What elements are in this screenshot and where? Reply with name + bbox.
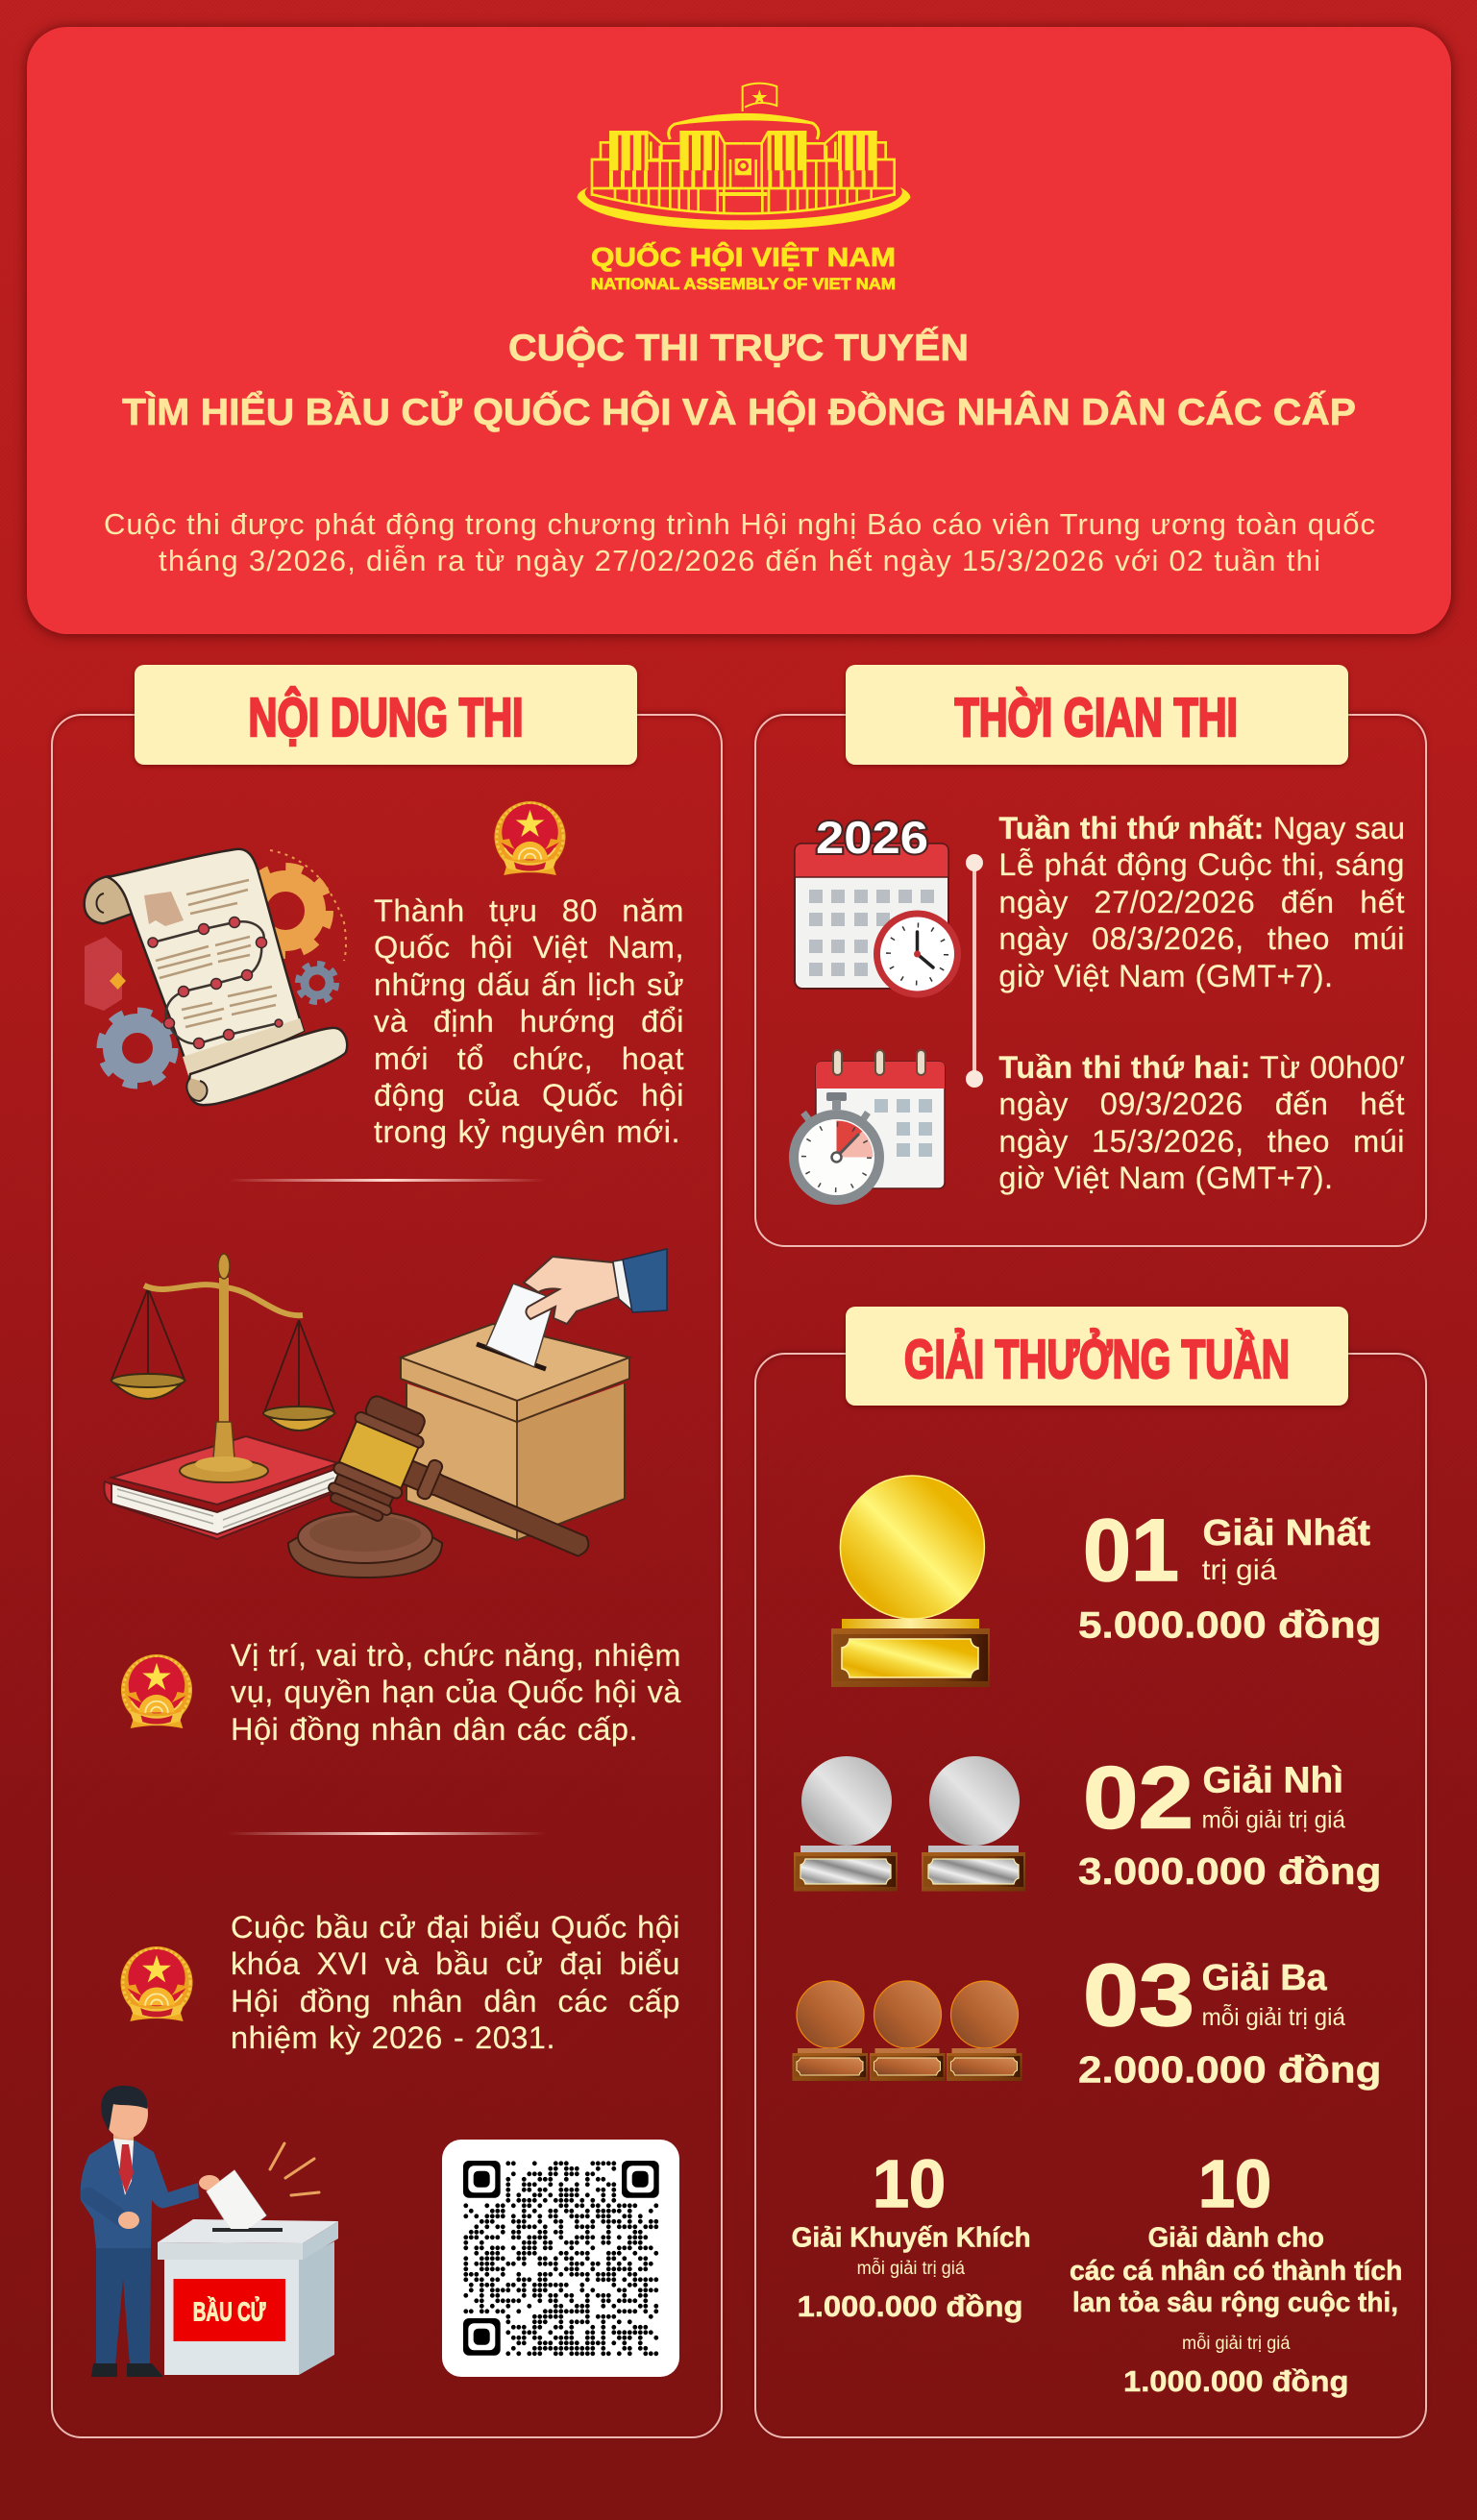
prize 2: text <box>1078 1753 1382 1893</box>
text: tuần thi thứ hai: Tuần thi thứ hai: Từ 00h00′ <box>998 1050 1405 1085</box>
prize 3: text: mỗi giải trị giá <box>1202 2003 1345 2031</box>
logo: National Assembly of Viet Nam <box>577 83 911 293</box>
text: tuần thi thứ nhất: ngày 08/3/2026, theo múi <box>998 921 1405 956</box>
ballot box <box>406 1383 517 1540</box>
prize: giải lan tỏa: lan tỏa sâu rộng cuộc thi, <box>1072 2288 1398 2318</box>
text: cuộc bầu cử: nhiệm kỳ 2026 - 2031. <box>231 2020 555 2055</box>
panel: giải thưởng tuần <box>753 1307 1428 2438</box>
text: tuần thi thứ nhất: Tuần thi thứ nhất: Ngay sau <box>998 811 1405 845</box>
panel: nội dung thi <box>49 665 725 2438</box>
text: tuần thi thứ hai: giờ Việt Nam (GMT+7). <box>998 1161 1334 1195</box>
text: tuần thi thứ nhất: giờ Việt Nam (GMT+7). <box>998 959 1334 993</box>
text: thành tựu 80 năm: và định hướng đổi <box>374 1004 684 1039</box>
text: vị trí vai trò: vụ, quyền hạn của Quốc hội và <box>231 1675 681 1709</box>
heading: nội dung thi <box>135 665 637 765</box>
prize 1: text: trị giá <box>1202 1554 1277 1586</box>
icon: scroll with gears <box>83 847 348 1107</box>
text: tuần thi thứ hai: ngày 15/3/2026, theo múi <box>998 1124 1405 1159</box>
prize 2: text: mỗi giải trị giá <box>1202 1806 1345 1833</box>
icon: calendar with stopwatch <box>789 1049 946 1205</box>
text: thành tựu 80 năm: Quốc hội Việt Nam, <box>374 930 684 965</box>
logo: National Assembly of Viet Nam: QUỐC HỘI VIỆT NAM <box>591 241 896 272</box>
intro text: tháng 3/2026, diễn ra từ ngày 27/02/2026 đến hết ngày 15/3/2026 với 02 tuần thi <box>159 544 1320 577</box>
text: vị trí vai trò: Hội đồng nhân dân các cấp. <box>231 1712 638 1747</box>
prize: giải khuyến khích <box>792 2152 1031 2323</box>
prize: giải lan tỏa: các cá nhân có thành tích <box>1070 2256 1403 2287</box>
icon: national emblem 1 <box>494 801 566 875</box>
icon: calendar 2026 with clock: 2026 <box>816 812 928 863</box>
prize 1: text <box>1078 1502 1382 1647</box>
title: CUỘC THI TRỰC TUYẾN <box>508 326 969 369</box>
icon: national emblem 2 <box>121 1654 192 1728</box>
logo: National Assembly of Viet Nam: NATIONAL ASSEMBLY OF VIET NAM <box>591 275 896 293</box>
text: thành tựu 80 năm: trong kỷ nguyên mới. <box>374 1114 680 1149</box>
prize: giải lan tỏa: 1.000.000 đồng <box>1123 2364 1349 2398</box>
book <box>104 1436 338 1539</box>
prize 3: text: Giải Ba <box>1202 1958 1327 1998</box>
heading: thời gian thi: THỜI GIAN THI <box>955 687 1238 748</box>
text: thành tựu 80 năm: mới tổ chức, hoạt <box>374 1041 684 1076</box>
prize: giải lan tỏa <box>1070 2152 1403 2398</box>
prize 3: text <box>1078 1955 1382 2091</box>
prize 1: text: 5.000.000 đồng <box>1078 1604 1382 1647</box>
text: tuần thi thứ nhất: Lễ phát động Cuộc thi, sáng <box>998 847 1405 882</box>
hand <box>524 1257 619 1324</box>
prize 3: text: 2.000.000 đồng <box>1078 2050 1382 2091</box>
prize: giải khuyến khích: 1.000.000 đồng <box>798 2289 1023 2323</box>
prize 1: text: Giải Nhất <box>1203 1513 1370 1554</box>
illustration: voter casting ballot: BẦU CỬ <box>193 2296 266 2327</box>
heading: thời gian thi <box>846 665 1348 765</box>
prize 1: gold trophy <box>831 1475 990 1687</box>
prize 3: bronze trophies <box>792 1980 1022 2081</box>
text: cuộc bầu cử <box>231 1910 680 2055</box>
text: tuần thi thứ nhất <box>998 811 1405 993</box>
icon: national emblem 3 <box>121 1946 192 2021</box>
header banner <box>27 27 1451 634</box>
heading: giải thưởng tuần <box>846 1307 1348 1406</box>
panel: thời gian thi <box>752 665 1429 1247</box>
gavel base <box>288 1523 442 1578</box>
text: vị trí vai trò: Vị trí, vai trò, chức năng, nhiệm <box>231 1638 681 1673</box>
text: vị trí vai trò <box>231 1638 681 1747</box>
scales <box>111 1288 334 1412</box>
text: thành tựu 80 năm <box>374 893 684 1149</box>
prize: giải lan tỏa: mỗi giải trị giá <box>1182 2332 1291 2354</box>
prize: giải lan tỏa: Giải dành cho <box>1148 2223 1324 2254</box>
QR code <box>442 2140 679 2377</box>
prize 2: text: 3.000.000 đồng <box>1078 1851 1382 1893</box>
prize: giải khuyến khích: mỗi giải trị giá <box>857 2257 965 2279</box>
intro text <box>104 507 1375 577</box>
text: tuần thi thứ hai <box>998 1050 1405 1195</box>
text: thành tựu 80 năm: những dấu ấn lịch sử <box>374 967 684 1002</box>
title <box>122 326 1356 433</box>
gavel <box>321 1391 610 1601</box>
text: tuần thi thứ nhất: ngày 27/02/2026 đến hết <box>998 885 1405 919</box>
text: cuộc bầu cử: Hội đồng nhân dân các cấp <box>231 1984 680 2018</box>
prize 2: silver trophies <box>794 1756 1025 1892</box>
title: TÌM HIỂU BẦU CỬ QUỐC HỘI VÀ HỘI ĐỒNG NHÂN DÂN CÁC CẤP <box>122 390 1356 433</box>
icon: calendar 2026 with clock <box>794 812 961 997</box>
prize: giải khuyến khích: Giải Khuyến Khích <box>792 2223 1031 2254</box>
illustration: scales, law book, gavel, ballot box <box>103 1248 668 1578</box>
prize 1: text: 01 <box>1083 1502 1179 1600</box>
intro text: Cuộc thi được phát động trong chương trình Hội nghị Báo cáo viên Trung ương toàn quốc <box>104 507 1375 541</box>
text: thành tựu 80 năm: Thành tựu 80 năm <box>374 893 684 928</box>
text: tuần thi thứ hai: ngày 09/3/2026 đến hết <box>998 1087 1405 1121</box>
timeline <box>966 854 983 1088</box>
heading: nội dung thi: NỘI DUNG THI <box>248 686 523 748</box>
prize 2: text: Giải Nhì <box>1203 1761 1343 1801</box>
illustration: voter casting ballot <box>81 2085 338 2377</box>
text: thành tựu 80 năm: động của Quốc hội <box>374 1078 684 1113</box>
text: cuộc bầu cử: Cuộc bầu cử đại biểu Quốc hội <box>231 1910 680 1945</box>
text: cuộc bầu cử: khóa XVI và bầu cử đại biểu <box>231 1946 680 1981</box>
